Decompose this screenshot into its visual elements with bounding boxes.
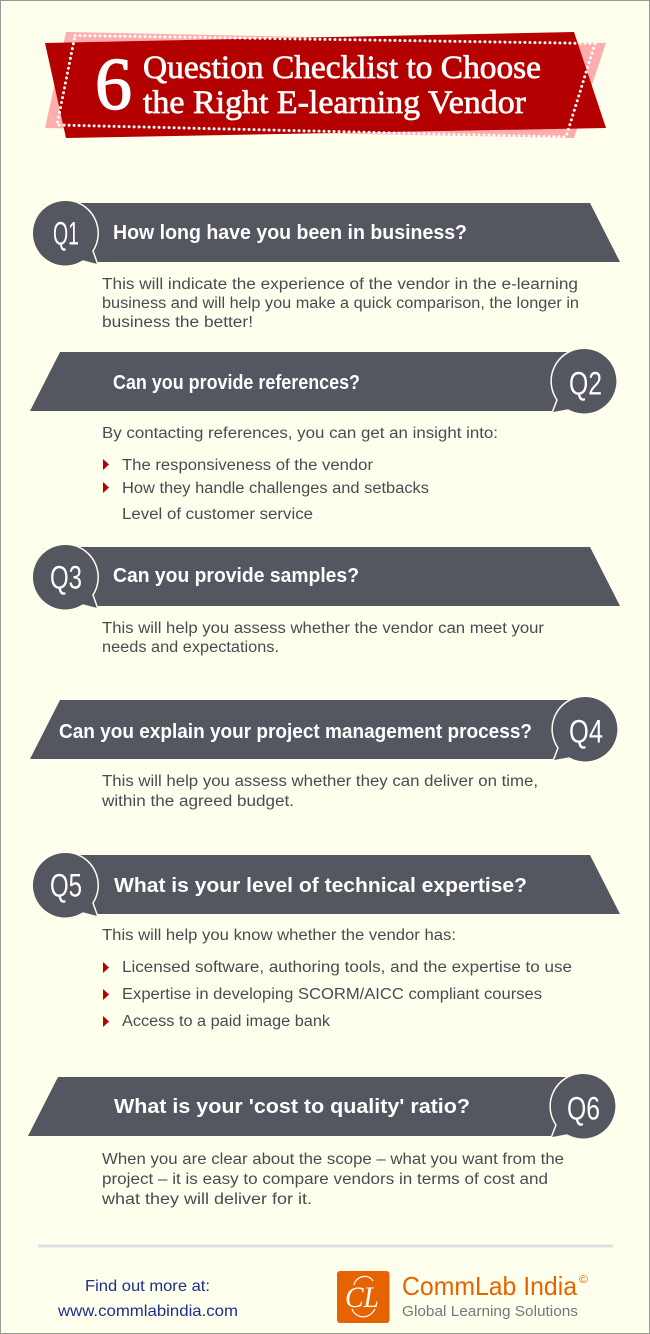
- footer: find out more: [57, 1278, 238, 1320]
- body text: This will help you know whether the vendor has:: [102, 927, 456, 944]
- heading: What is your 'cost to quality' ratio?: [114, 1096, 470, 1118]
- heading: What is your level of technical expertise?: [114, 875, 527, 897]
- body text: needs and expectations.: [102, 639, 279, 656]
- title number: 6: [95, 44, 132, 126]
- heading: Can you explain your project management process?: [59, 721, 532, 743]
- badge: Q2: [551, 348, 617, 414]
- bullet list: Access to a paid image bank: [122, 1013, 330, 1030]
- heading: Can you provide references?: [113, 372, 360, 394]
- badge: Q5: [32, 852, 98, 918]
- badge: Q6: Q6: [567, 1090, 600, 1126]
- badge: Q3: [32, 544, 98, 610]
- bullet list: [103, 959, 572, 1030]
- body text: When you are clear about the scope – what you want from the: [102, 1151, 564, 1168]
- panel: question 2: [30, 348, 617, 523]
- badge: Q4: Q4: [569, 714, 603, 750]
- panel: question 4: [30, 696, 618, 810]
- footer: CommLab India logo: CommLab India: [402, 1271, 578, 1301]
- body text: project – it is easy to compare vendors in terms of cost and: [102, 1171, 548, 1188]
- body text: This will help you assess whether the vendor can meet your: [102, 620, 544, 637]
- footer: CommLab India logo: ©: [579, 1274, 588, 1286]
- body text: [101, 773, 538, 810]
- footer: find out more: www.commlabindia.com: [57, 1303, 238, 1320]
- badge: Q2: Q2: [569, 366, 602, 402]
- body text: within the agreed budget.: [101, 793, 294, 810]
- badge: Q5: Q5: [50, 868, 82, 904]
- body text: [102, 620, 544, 656]
- heading: Can you provide samples?: [113, 565, 359, 587]
- title text: Question Checklist to Choose: [143, 50, 541, 86]
- icon: CL logo mark: CL: [345, 1281, 379, 1314]
- panel: question 1: [32, 200, 620, 331]
- panel: question 5: [32, 852, 620, 1030]
- title banner: [45, 32, 606, 138]
- bullet list: [103, 457, 429, 523]
- panel: question 3: [32, 544, 620, 656]
- title text: the Right E-learning Vendor: [143, 85, 526, 121]
- bullet list: Expertise in developing SCORM/AICC compliant courses: [122, 986, 542, 1003]
- footer: find out more: Find out more at:: [85, 1278, 210, 1295]
- icon: CL logo mark: [337, 1271, 390, 1323]
- footer: CommLab India logo: Global Learning Solutions: [402, 1303, 578, 1320]
- body text: [101, 1151, 564, 1208]
- bullet list: How they handle challenges and setbacks: [122, 480, 429, 497]
- body text: what they will deliver for it.: [101, 1191, 312, 1208]
- badge: Q1: [32, 200, 98, 266]
- body text: business and will help you make a quick comparison, the longer in: [102, 295, 579, 312]
- bullet list: Licensed software, authoring tools, and the expertise to use: [122, 959, 572, 976]
- body text: business the better!: [102, 314, 253, 331]
- badge: Q3: Q3: [50, 560, 82, 596]
- footer: CommLab India logo: [337, 1271, 588, 1323]
- title text: [143, 50, 541, 121]
- body text: This will indicate the experience of the vendor in the e-learning: [102, 276, 578, 293]
- body text: [102, 276, 579, 331]
- badge: Q6: [550, 1073, 616, 1139]
- heading: How long have you been in business?: [113, 222, 467, 244]
- badge: Q4: [552, 696, 618, 762]
- badge: Q1: Q1: [53, 216, 79, 252]
- body text: By contacting references, you can get an insight into:: [102, 425, 498, 442]
- body text: This will help you assess whether they can deliver on time,: [102, 773, 538, 790]
- panel: question 6: [28, 1073, 616, 1208]
- bullet list: The responsiveness of the vendor: [122, 457, 373, 474]
- bullet list: Level of customer service: [122, 506, 313, 523]
